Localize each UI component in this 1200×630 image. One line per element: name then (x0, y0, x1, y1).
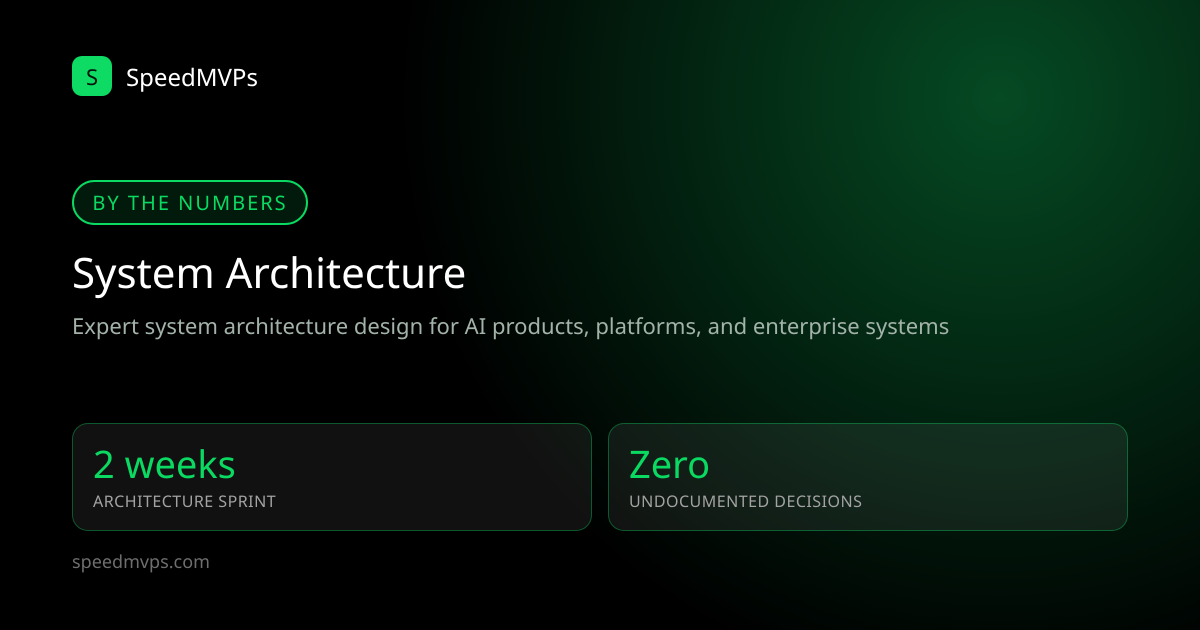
brand logo (72, 56, 258, 96)
icon: logo mark: S (86, 62, 98, 92)
stat label: ARCHITECTURE SPRINT (93, 490, 276, 512)
icon: logo mark (72, 56, 112, 96)
footer url: speedmvps.com (72, 550, 210, 574)
title: System Architecture (72, 244, 466, 301)
stat card: architecture sprint (72, 423, 592, 531)
stat value: Zero (629, 438, 710, 490)
brand name: SpeedMVPs (126, 61, 258, 94)
subtitle: Expert system architecture design for AI products, platforms, and enterprise systems (72, 311, 949, 341)
badge: BY THE NUMBERS (92, 189, 288, 216)
stat label: UNDOCUMENTED DECISIONS (629, 490, 862, 512)
stat card: undocumented decisions (608, 423, 1128, 531)
badge (72, 180, 308, 225)
stat value: 2 weeks (93, 438, 236, 490)
